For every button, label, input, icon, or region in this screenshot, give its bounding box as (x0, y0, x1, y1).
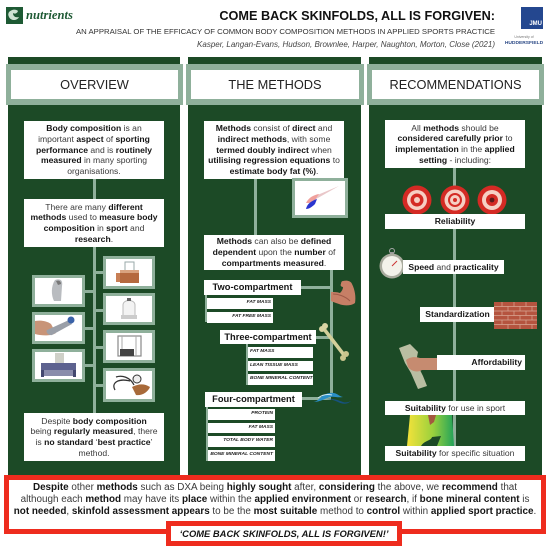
item: protein (208, 409, 275, 420)
journal logo: nutrients: nutrients (26, 8, 73, 22)
text block: compartments: compartments measured. (222, 258, 326, 268)
label: four-compartment: Four-compartment (212, 394, 295, 404)
label: four-compartment (205, 392, 302, 407)
text block: methods definition: termed doubly indirect when (216, 145, 332, 155)
text block: methods should be considered: considered carefully prior to (397, 133, 513, 143)
item: lean tissue mass: LEAN TISSUE MASS (250, 363, 298, 368)
text block: different methods: research. (75, 234, 113, 244)
text block: body composition: performance and is routinely (36, 145, 152, 155)
label: speed and practicality (403, 260, 504, 274)
heading: the methods (186, 64, 364, 105)
authors: Kasper, Langan-Evans, Hudson, Brownlee, Harper, Naughton, Morton, Close (2021) (197, 40, 495, 49)
heading: recommendations (367, 64, 544, 105)
label: suitability for use in sport (385, 401, 525, 415)
image: skinfold calipers (103, 368, 155, 402)
item: fat mass (208, 423, 275, 433)
item: fat mass: FAT MASS (249, 425, 273, 430)
callout: recommendation: not needed, skinfold assessment appears to be the most suitable method to control within applied sport practice. (14, 506, 536, 517)
item: protein: PROTEIN (251, 411, 273, 416)
image: hydrostatic weighing tank (103, 330, 155, 363)
label: two-compartment: Two-compartment (213, 282, 292, 292)
two-compartment group (204, 280, 301, 323)
text block: no best practice: being regularly measured, there (30, 426, 158, 436)
text block: no best practice: method. (78, 448, 110, 458)
heading: recommendations: RECOMMENDATIONS (390, 77, 522, 92)
text block: body composition: organisations. (67, 166, 121, 176)
callout: recommendation: Despite other methods such as DXA being highly sought after, considering the above, we recommend that (33, 482, 517, 493)
heading: overview (6, 64, 183, 105)
label: affordability: Affordability (471, 357, 522, 367)
text block: different methods: composition in sport and (44, 223, 144, 233)
icon: bone (319, 323, 349, 361)
label: reliability: Reliability (435, 216, 475, 226)
logo: LJMU: JMU (529, 21, 542, 27)
icon: stopwatch (380, 248, 403, 278)
item: fat mass (207, 298, 273, 309)
text block: compartments: dependent upon the number of (213, 247, 335, 257)
label: reliability (385, 214, 525, 229)
item: bone mineral content: BONE MINERAL CONTENT (250, 376, 313, 381)
four-compartment group (205, 392, 302, 461)
image: DXA scanner (32, 349, 85, 382)
text block: body composition: important aspect of sporting (38, 134, 150, 144)
text block: compartments (204, 235, 344, 270)
image: ultrasound probe in hand (32, 312, 85, 344)
label: suitability for use in sport: Suitability for use in sport (405, 403, 505, 413)
heading: overview: OVERVIEW (60, 77, 129, 92)
image: green map with pointer (407, 415, 454, 446)
icon: water wave (314, 392, 351, 404)
label: standardization: Standardization (425, 309, 490, 319)
text block: compartments: Methods can also be defined (217, 236, 331, 246)
text block: methods definition: utilising regression equations to (208, 155, 340, 165)
callout: recommendation (4, 475, 546, 534)
image: handheld scanner device (32, 275, 85, 307)
text block: methods should be considered (385, 120, 525, 168)
text block: no best practice: is no standard ‘best practice’ (35, 437, 153, 447)
item: fat mass: FAT MASS (250, 349, 274, 354)
panel: the methods (188, 57, 361, 482)
logo: University of Huddersfield (505, 35, 543, 46)
callout: recommendation: although each method may have its place within the applied environment or research, if bone mineral content is (21, 494, 529, 505)
panel: recommendations (369, 57, 542, 482)
item: bone mineral content: BONE MINERAL CONTENT (210, 452, 273, 457)
text block: methods definition (204, 121, 344, 179)
text block: different methods: methods used to measure body (30, 212, 158, 222)
icon: brick wall (494, 302, 537, 329)
icon: flexed arm (331, 280, 356, 306)
journal logo: nutrients (6, 7, 73, 24)
text block: methods definition: indirect methods, with some (218, 134, 330, 144)
label: affordability (437, 355, 525, 370)
callout: closing quote (166, 521, 402, 546)
label: suitability for specific situation: Suitability for specific situation (396, 448, 514, 458)
label: suitability for specific situation (385, 446, 525, 461)
title: COME BACK SKINFOLDS, ALL IS FORGIVEN: (219, 9, 495, 23)
text block: body composition: Body composition is an (46, 123, 142, 133)
label: three-compartment (220, 330, 316, 344)
item: lean tissue mass (248, 361, 313, 371)
text block: methods definition: estimate body fat (%). (230, 166, 318, 176)
text block: methods definition: Methods consist of direct and (216, 123, 332, 133)
image: bioimpedance scale (103, 293, 155, 325)
connector: recommendations (453, 168, 456, 446)
text block: no best practice (24, 413, 164, 461)
item: bone mineral content (248, 374, 313, 385)
text block: methods should be considered: implementation in the applied (395, 144, 515, 154)
text block: body composition (24, 121, 164, 179)
item: fat free mass: FAT FREE MASS (232, 314, 271, 319)
logo: LJMU (521, 7, 543, 29)
item: fat mass (248, 347, 313, 358)
panel: overview (8, 57, 180, 482)
label: three-compartment: Three-compartment (224, 332, 312, 342)
image: air displacement pod (103, 256, 155, 289)
icon: hand gripping money (399, 344, 437, 389)
item: total body water (208, 436, 275, 447)
logo: University of Huddersfield: HUDDERSFIELD (505, 41, 543, 46)
three-compartment group (220, 330, 316, 385)
item: fat free mass (207, 312, 273, 323)
callout: closing quote: ‘COME BACK SKINFOLDS, ALL IS FORGIVEN!’ (180, 528, 388, 539)
label: speed and practicality: Speed and practicality (408, 262, 499, 272)
label: two-compartment (204, 280, 301, 295)
text block: methods should be considered: All methods should be (411, 123, 499, 133)
label: standardization (420, 307, 495, 322)
text block: body composition: measured in many sporting (41, 155, 147, 165)
subtitle: AN APPRAISAL OF THE EFFICACY OF COMMON BODY COMPOSITION METHODS IN APPLIED SPORTS PRACTICE (76, 27, 495, 36)
text block: different methods: There are many different (45, 202, 143, 212)
text block: methods should be considered: setting - including: (419, 155, 491, 165)
item: total body water: TOTAL BODY WATER (223, 438, 273, 443)
item: fat mass: FAT MASS (247, 300, 271, 305)
heading: the methods: THE METHODS (228, 77, 322, 92)
logo: University of Huddersfield: University of (514, 35, 534, 39)
image: regression scatter plot (292, 178, 348, 218)
item: bone mineral content (208, 450, 275, 461)
text block: different methods (24, 199, 164, 247)
icon: three targets (402, 186, 506, 214)
text block: no best practice: Despite body composition (41, 416, 147, 426)
